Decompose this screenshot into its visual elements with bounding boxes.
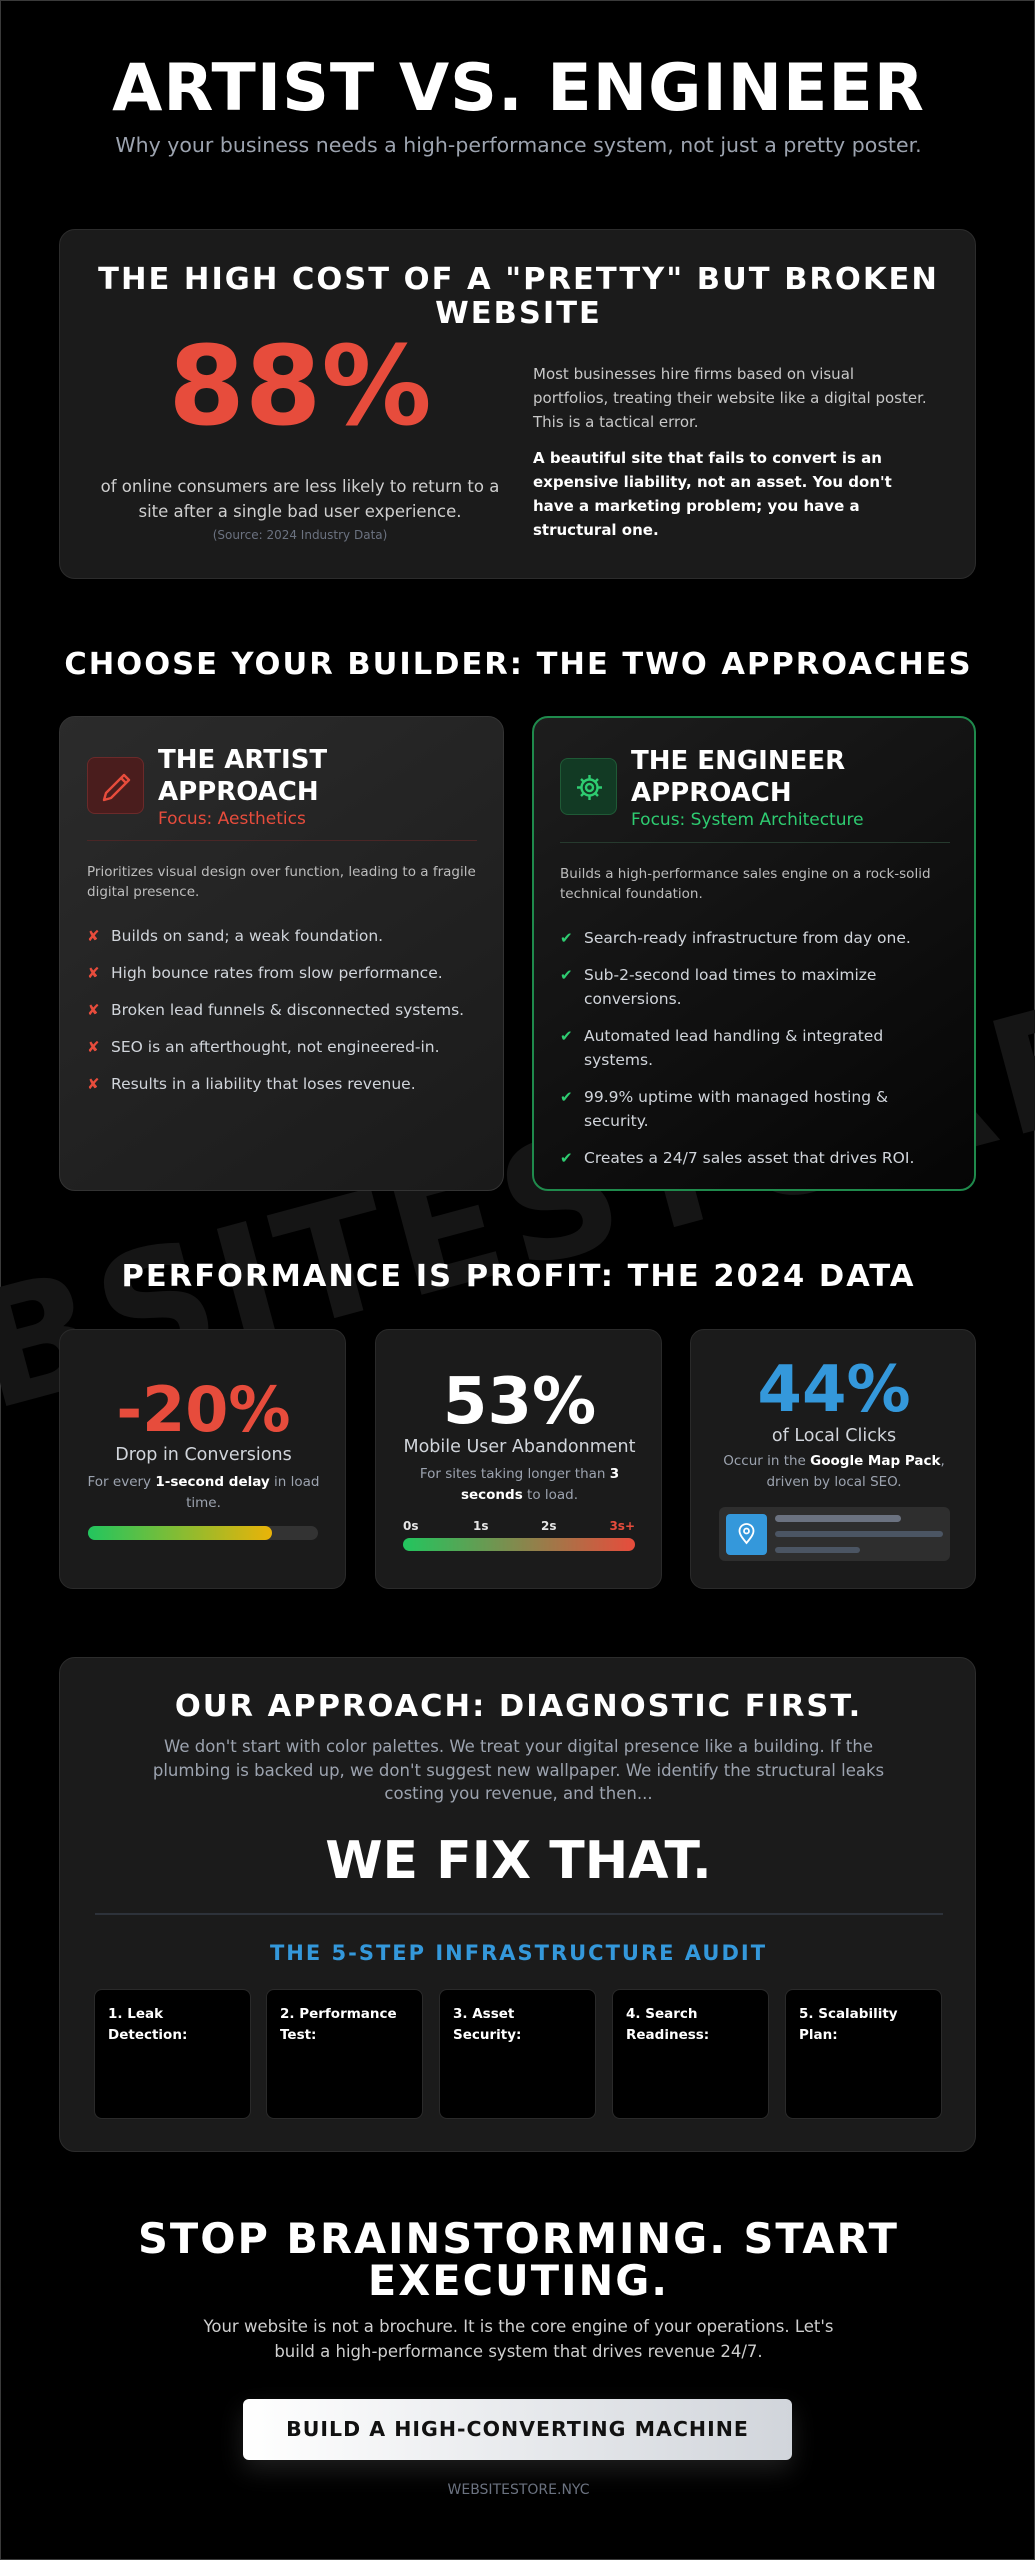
title: APPROACH [631,778,792,808]
list: benefits: Sub-2-second load times to maximize conversions. [584,966,876,1008]
step 4: Readiness: [626,2027,709,2043]
list: benefits [560,929,914,1167]
list: benefits: ✔ [560,1149,573,1167]
list: drawbacks: Broken lead funnels & disconnected systems. [111,1001,464,1019]
step 1 [94,1989,251,2119]
right text: Most businesses hire firms based on visual portfolios, treating their website like a digital poster. This is a tactical error. [533,365,927,431]
closing heading [138,2214,899,2305]
step 5 [785,1989,942,2119]
stat card: -20%: -20% [116,1373,291,1446]
stat card: 53%: 0s [403,1519,418,1533]
stat card: 53%: Mobile User Abandonment [404,1437,636,1457]
closing heading: EXECUTING. [368,2256,669,2305]
stat card: -20%: For every 1-second delay in load time. [88,1474,319,1511]
step 5: Plan: [799,2027,838,2043]
step 5: 5. Scalability [799,2006,898,2022]
stat card: 53%: 2s [541,1519,556,1533]
list: drawbacks: ✘ [87,964,100,982]
step 1: Detection: [108,2027,187,2043]
closing paragraph: Your website is not a brochure. It is the core engine of your operations. Let's build a high-performance system that drives revenue 24/7. [203,2317,834,2361]
list: drawbacks: ✘ [87,1038,100,1056]
stat card: 53%: 3s+ [609,1519,635,1533]
list: benefits: ✔ [560,1027,573,1045]
subheading: 5-step audit: THE 5-STEP INFRASTRUCTURE AUDIT [270,1941,767,1965]
CTA button [243,2399,792,2460]
step 2: Test: [280,2027,316,2043]
title [158,745,327,807]
list: drawbacks [87,927,464,1093]
panel: artist approach [59,716,504,1191]
stat card: -20% [59,1329,346,1589]
step 3: Security: [453,2027,521,2043]
list: benefits: ✔ [560,1088,573,1106]
right text [532,365,927,539]
stat card: 44%: of Local Clicks [772,1426,896,1446]
stat card: 44%: 44% [757,1353,911,1427]
stat card: 44%: Occur in the Google Map Pack, driven by local SEO. [723,1453,945,1490]
progress bar [88,1526,318,1540]
step 1: 1. Leak [108,2006,163,2022]
focus: Focus: Aesthetics [158,809,306,829]
icon: pencil [87,757,144,814]
title: THE ARTIST [158,745,327,775]
list: drawbacks: ✘ [87,1075,100,1093]
description: Prioritizes visual design over function, leading to a fragile digital presence. [87,864,476,900]
list: drawbacks: ✘ [87,1001,100,1019]
list: drawbacks: Builds on sand; a weak foundation. [111,927,383,945]
source: (Source: 2024 Industry Data) [213,528,387,542]
step 4 [612,1989,769,2119]
we fix that: WE FIX THAT. [325,1831,712,1891]
title: APPROACH [158,777,319,807]
list: benefits: ✔ [560,929,573,947]
heading [98,262,939,331]
title: THE ENGINEER [631,746,845,776]
stat card: 44% [690,1329,976,1589]
step 2: 2. Performance [280,2006,397,2022]
stat card: 53%: 53% [443,1365,596,1439]
map pack mockup [719,1507,950,1561]
list: drawbacks: High bounce rates from slow performance. [111,964,443,982]
heading: OUR APPROACH: DIAGNOSTIC FIRST. [175,1689,862,1724]
panel: high cost [59,229,976,579]
paragraph: We don't start with color palettes. We treat your digital presence like a building. If the plumbing is backed up, we don't suggest new wallpaper. We identify the structural leaks costing you revenue, and then... [153,1737,884,1803]
stat card: 53%: For sites taking longer than 3 seconds to load. [420,1466,619,1503]
stat card: 53% [375,1329,662,1589]
big stat 88%: 88% [168,322,432,450]
heading: THE HIGH COST OF A "PRETTY" BUT BROKEN [98,262,939,297]
list: benefits: ✔ [560,966,573,984]
step 2 [266,1989,423,2119]
focus: Focus: System Architecture [631,810,864,830]
step 3 [439,1989,596,2119]
panel: diagnostic first [59,1657,976,2152]
panel: engineer approach [532,716,976,1191]
heading: WEBSITE [435,296,602,331]
subtitle: Why your business needs a high-performance system, not just a pretty poster. [115,133,922,157]
title [631,746,845,808]
timeline bar [403,1519,635,1551]
closing heading: STOP BRAINSTORMING. START [138,2214,899,2263]
stat card: -20%: Drop in Conversions [115,1445,292,1465]
heading: performance is profit: PERFORMANCE IS PROFIT: THE 2024 DATA [122,1259,915,1294]
list: benefits: 99.9% uptime with managed hosting & security. [584,1088,888,1130]
list: drawbacks: ✘ [87,927,100,945]
icon: gear [560,758,617,815]
right text: A beautiful site that fails to convert is an expensive liability, not an asset. You don't have a marketing problem; you have a structural one. [533,449,892,539]
stat description: of online consumers are less likely to return to a site after a single bad user experience. [101,477,499,521]
footer: WEBSITESTORE.NYC [448,2482,589,2498]
list: benefits: Automated lead handling & integrated systems. [584,1027,883,1069]
list: drawbacks: Results in a liability that loses revenue. [111,1075,416,1093]
stat card: 53%: 1s [473,1519,488,1533]
step 3: 3. Asset [453,2006,514,2022]
CTA button: BUILD A HIGH-CONVERTING MACHINE [286,2417,749,2441]
description: Builds a high-performance sales engine on a rock-solid technical foundation. [560,866,931,902]
step 4: 4. Search [626,2006,697,2022]
list: drawbacks: SEO is an afterthought, not engineered-in. [111,1038,440,1056]
list: benefits: Creates a 24/7 sales asset that drives ROI. [584,1149,914,1167]
list: benefits: Search-ready infrastructure from day one. [584,929,911,947]
heading: choose your builder: CHOOSE YOUR BUILDER: THE TWO APPROACHES [64,647,973,682]
title: ARTIST VS. ENGINEER [112,51,925,126]
